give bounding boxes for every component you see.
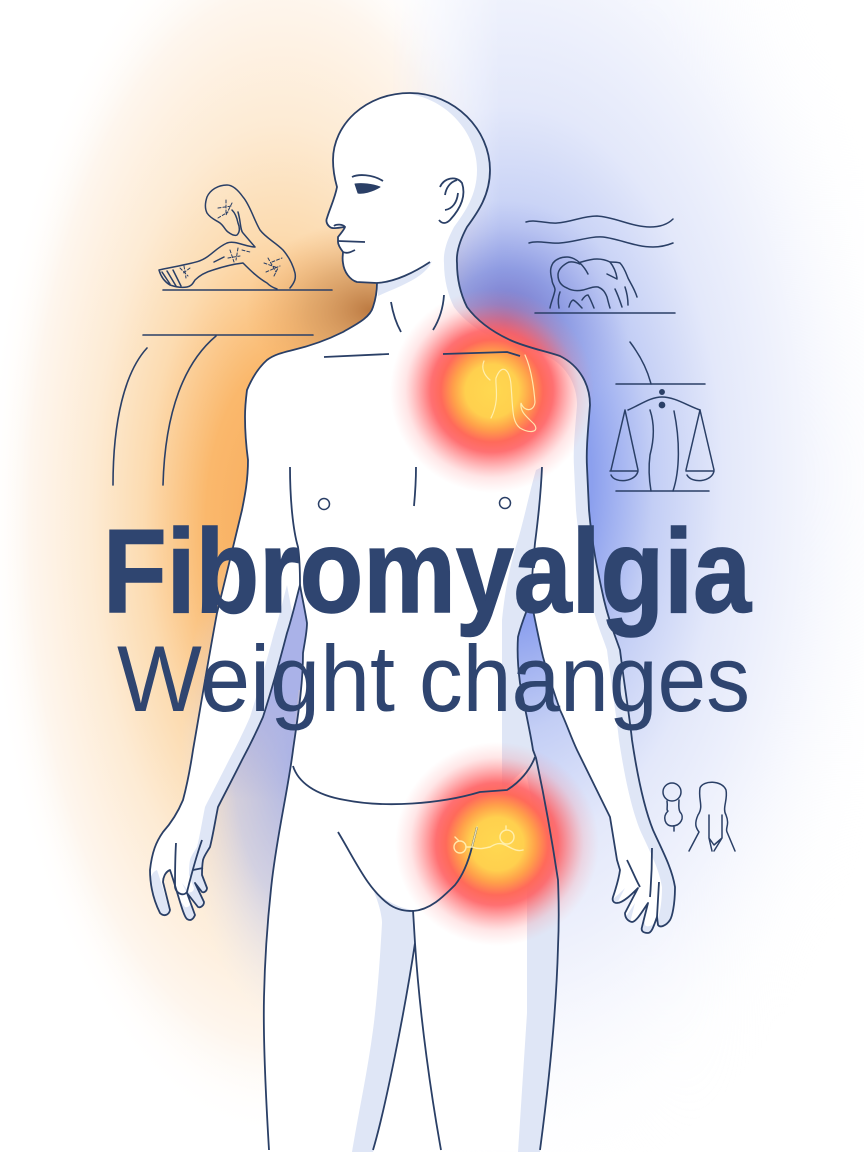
groin line — [338, 827, 477, 911]
background: purple neck shade — [380, 200, 630, 450]
right leg shadow strip — [518, 891, 546, 1152]
hip line — [293, 757, 535, 804]
jaw shadow — [378, 261, 432, 296]
body outline — [150, 93, 675, 1150]
pain glow: hip — [395, 742, 599, 946]
mouth — [338, 241, 365, 253]
nerve squiggles: hip — [454, 826, 523, 853]
collar lines — [324, 352, 520, 357]
neck lines — [391, 295, 444, 332]
jaw line — [377, 262, 430, 283]
title: Fibromyalgia — [103, 505, 752, 638]
inner leg lines — [373, 910, 441, 1150]
left hand palm lines — [175, 840, 203, 894]
subtitle — [117, 626, 750, 731]
body silhouette with shadow — [150, 93, 675, 1150]
right hand palm lines — [627, 848, 659, 917]
background: orange glow — [0, 0, 575, 1140]
icon: leg with pain points — [159, 185, 295, 289]
nose — [334, 225, 345, 227]
background: brown neck shade — [245, 220, 495, 400]
subtitle: changes — [419, 626, 750, 731]
left leg shadow strip — [352, 890, 415, 1152]
background: lavender left gap top — [268, 585, 307, 690]
nerve squiggles: shoulder — [483, 355, 536, 431]
nipples — [318, 498, 330, 510]
icon: scales — [610, 342, 714, 491]
background: blue glow — [429, 0, 828, 1032]
chest midline — [414, 467, 416, 506]
icon: waves and cloud shape — [526, 216, 675, 313]
torso side shadow — [502, 467, 542, 790]
body figure — [137, 93, 675, 1152]
eye — [352, 175, 383, 193]
background: lavender left gap — [215, 585, 307, 800]
torso creases — [290, 467, 542, 600]
left lines: shelf and curves — [113, 290, 332, 485]
pain glow: shoulder — [390, 289, 594, 493]
subtitle: Weight — [117, 626, 395, 731]
icon: small figures lower right — [663, 782, 735, 851]
background: blue between left arm and leg — [180, 490, 420, 1030]
ear — [439, 178, 464, 223]
